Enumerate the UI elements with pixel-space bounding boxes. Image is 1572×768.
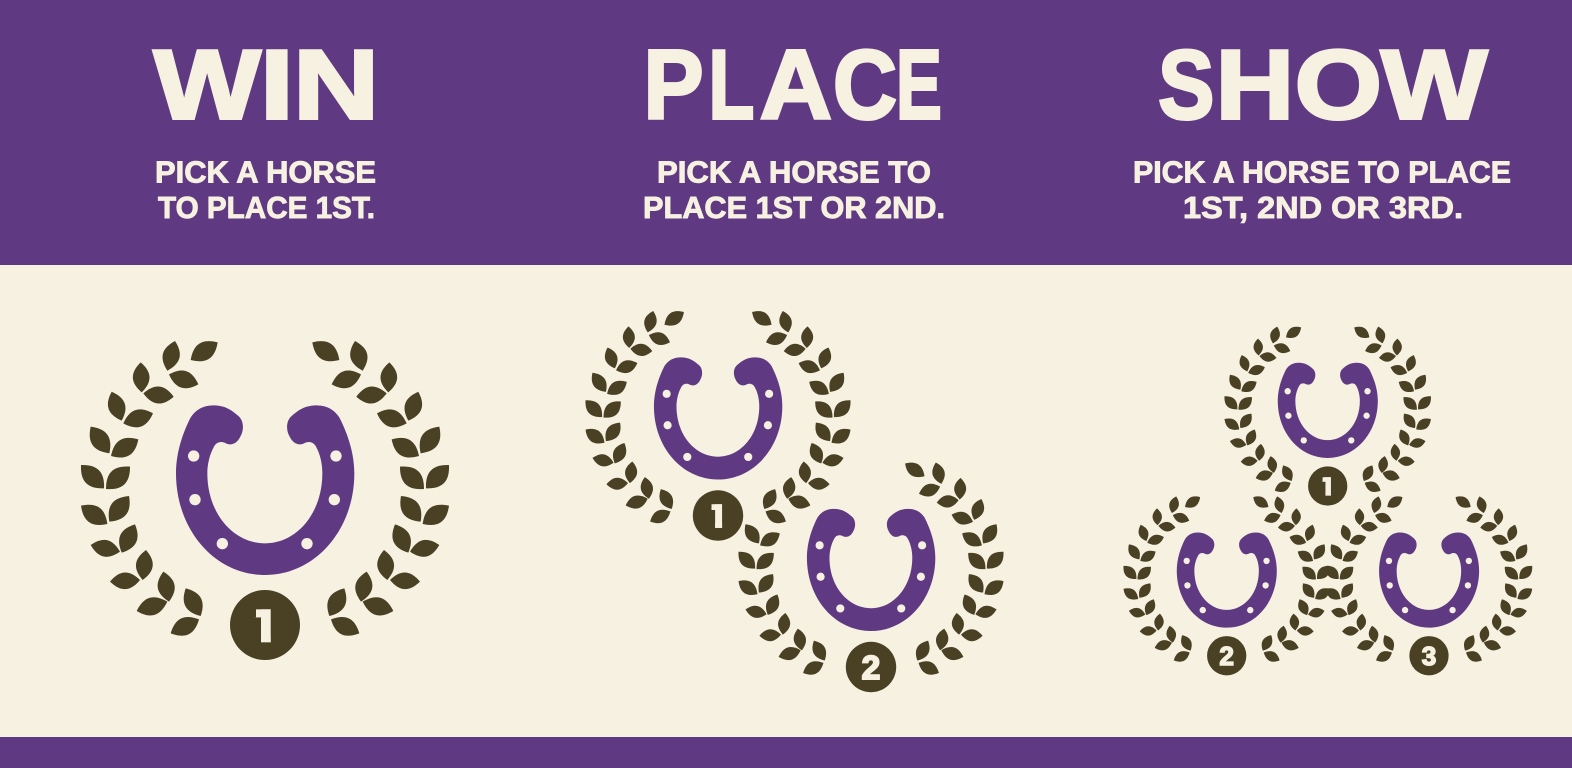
heading: win: N: [293, 30, 379, 140]
heading: win: I: [260, 30, 294, 140]
description: place: PICK A HORSE TO: [657, 156, 931, 190]
description: place: [643, 156, 945, 225]
heading: place: P: [644, 30, 704, 140]
description: show: [1133, 156, 1511, 225]
icon: place wreath with horseshoe, second place: 2: [862, 650, 880, 687]
icon: win wreath with horseshoe, first place: [75, 335, 455, 660]
description: show: PICK A HORSE TO PLACE: [1133, 156, 1511, 190]
icon: show wreath with horseshoe, first place: 1: [1320, 471, 1335, 501]
heading: place: E: [896, 30, 942, 140]
icon: place wreath with horseshoe, first place: 1: [709, 498, 727, 535]
heading: place: L: [708, 30, 754, 140]
panel: show heading and description: [1133, 30, 1511, 225]
description: win: PICK A HORSE: [155, 156, 376, 190]
heading: place: C: [833, 30, 897, 140]
panel: win heading and description: [154, 30, 379, 225]
heading: show: W: [1381, 30, 1488, 140]
icon: show wreath with horseshoe, third place: 3: [1422, 641, 1436, 671]
heading: show: H: [1216, 30, 1294, 140]
description: win: [155, 156, 376, 225]
description: win: TO PLACE 1ST.: [158, 191, 375, 225]
heading: show: O: [1295, 30, 1382, 140]
icon: place wreath with horseshoe, second place: [734, 458, 1008, 692]
icon: show wreath with horseshoe, first place: [1221, 323, 1435, 506]
icon: place wreath with horseshoe, first place: [581, 307, 855, 541]
icon: show wreath with horseshoe, second place: 2: [1219, 641, 1234, 671]
heading: win: W: [154, 30, 261, 140]
top header band: [0, 0, 1572, 265]
icon: show wreath with horseshoe, third place: [1322, 493, 1536, 675]
heading: place: A: [760, 30, 832, 140]
panel: place heading and description: [643, 30, 945, 225]
heading: show: S: [1158, 30, 1214, 140]
icon: win wreath with horseshoe, first place: 1: [252, 599, 278, 651]
description: place: PLACE 1ST OR 2ND.: [643, 191, 945, 225]
description: show: 1ST, 2ND OR 3RD.: [1183, 191, 1463, 225]
icon: show wreath with horseshoe, second place: [1120, 493, 1334, 675]
bottom band: [0, 737, 1572, 768]
